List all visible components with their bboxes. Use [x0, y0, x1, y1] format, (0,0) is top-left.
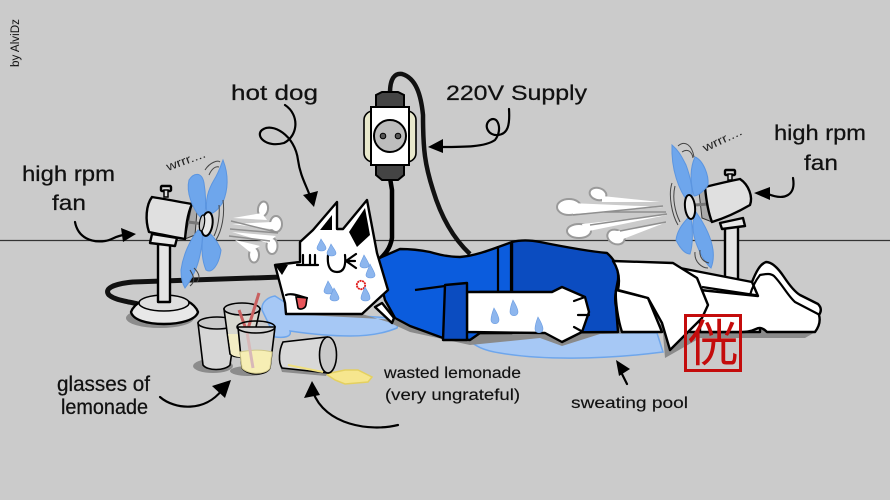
- torso: blue shirt: [375, 240, 618, 340]
- arm: [467, 287, 589, 342]
- arrow: hot dog: [260, 105, 318, 207]
- label: hot dog: hot dog: [231, 82, 318, 105]
- arrow: supply: [428, 109, 509, 153]
- arrow: wasted: [304, 381, 398, 427]
- label: high rpm fan left: high rpm: [22, 163, 115, 186]
- socket: [364, 92, 416, 180]
- power cord: lower: [377, 178, 392, 262]
- arrow: pool: [616, 360, 630, 384]
- right fan: [670, 143, 751, 286]
- arrow: left fan: [75, 222, 136, 242]
- foot: [700, 262, 821, 332]
- arrow: right fan: [754, 178, 793, 200]
- rear leg: [616, 290, 662, 332]
- glass 2 with lemonade: [224, 303, 260, 357]
- dog head: [275, 200, 394, 323]
- label: wasted lemonade: (very ungrateful): [385, 387, 520, 404]
- sweating pool under head: [262, 296, 397, 337]
- label: 220V Supply: 220V Supply: [446, 82, 588, 105]
- label: glasses of lemonade: lemonade: [61, 396, 148, 419]
- label: glasses of lemonade: glasses of: [57, 373, 150, 396]
- far leg: [680, 268, 760, 332]
- left wind: [229, 201, 282, 262]
- tipped glass: [279, 337, 336, 376]
- label: high rpm fan right: high rpm: [774, 122, 866, 145]
- wrrr left: wrrr....: [163, 147, 208, 174]
- spilled lemonade: [326, 370, 372, 384]
- sweating pool under body: [462, 333, 663, 358]
- fan cord: [108, 277, 282, 304]
- thigh: [613, 261, 708, 350]
- red stamp: 侊: [688, 316, 738, 372]
- right wind: [557, 186, 667, 247]
- arrow: glasses: [160, 380, 231, 407]
- power cord: wall: [390, 74, 470, 254]
- glass 3 with lemonade and straws: [230, 293, 275, 376]
- label: high rpm fan right: [774, 122, 866, 175]
- label: wasted lemonade: wasted lemonade: [383, 365, 521, 382]
- label: high rpm fan left: fan: [52, 192, 86, 215]
- label: sweating pool: sweating pool: [571, 395, 688, 412]
- label: wasted lemonade: [383, 365, 521, 404]
- body shadow: [286, 314, 817, 358]
- sleeve: [415, 283, 467, 340]
- label: high rpm fan right: fan: [804, 152, 838, 175]
- left fan: [126, 160, 227, 328]
- label: glasses of lemonade: [57, 373, 150, 419]
- glass 1: [193, 317, 236, 373]
- wrrr right: wrrr....: [699, 124, 744, 155]
- label: high rpm fan left: [22, 163, 115, 215]
- credit: by AlviDz: by AlviDz: [10, 19, 22, 67]
